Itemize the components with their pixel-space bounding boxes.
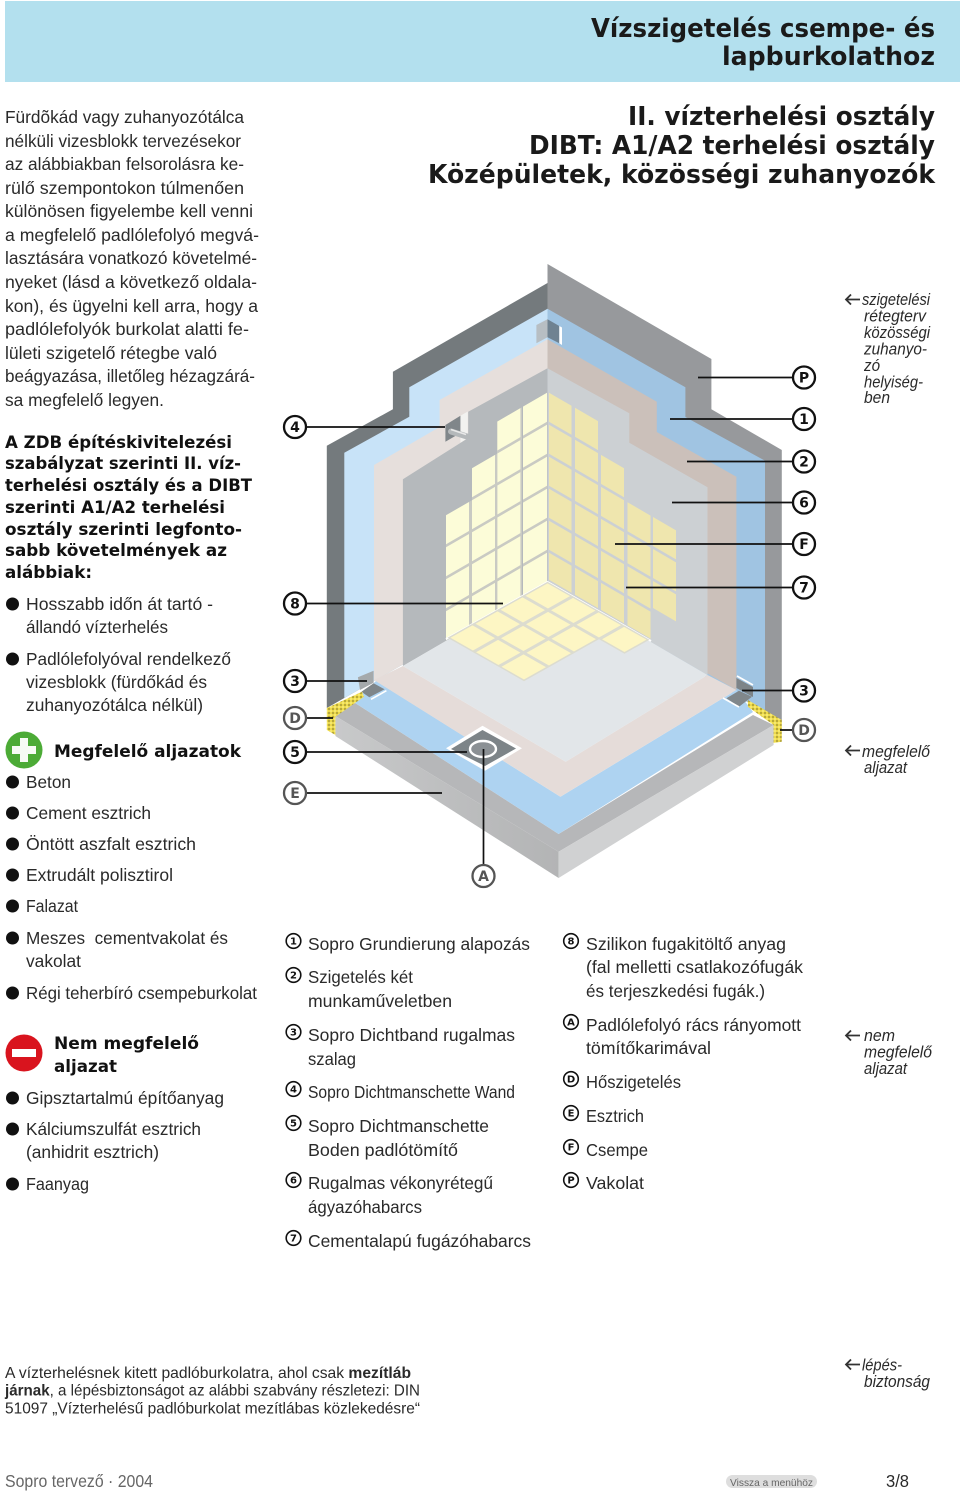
requirements list: Hosszabb időn át tartó - xyxy=(26,594,213,614)
intro text block: beágyazása, illetőleg hézagzárá- xyxy=(5,366,255,386)
barefoot note xyxy=(4,1365,420,1418)
left wall tiles xyxy=(446,393,547,640)
intro text block: padlólefolyók burkolat alatti fe- xyxy=(5,319,249,339)
title: Vízszigetelés csempe- és xyxy=(591,14,935,44)
barefoot note: járnak, a lépésbiztonságot az alábbi szabvány részletezi: DIN xyxy=(4,1382,420,1400)
requirements list: vizesblokk (fürdőkád és xyxy=(26,672,207,692)
list: unsuitable substrates: Faanyag xyxy=(26,1174,89,1194)
legend item 7: Cementalapú fugázóhabarcs xyxy=(308,1231,531,1251)
callout D left xyxy=(284,707,306,729)
legend item E: Esztrich xyxy=(586,1106,644,1126)
list: suitable substrates: vakolat xyxy=(26,951,81,971)
intro text block: sa megfelelő legyen. xyxy=(5,390,164,410)
footer: publisher: Sopro tervező · 2004 xyxy=(5,1471,153,1491)
list: suitable substrates xyxy=(6,772,257,1003)
legend item 8: és terjeszkedési fugák.) xyxy=(586,981,765,1001)
requirements list: állandó vízterhelés xyxy=(26,617,168,637)
legend item 4: Sopro Dichtmanschette Wand xyxy=(308,1082,515,1102)
list: unsuitable substrates: Kálciumszulfát esztrich xyxy=(26,1119,201,1139)
thermal insulation right xyxy=(748,700,782,743)
legend item 6 xyxy=(286,1173,493,1217)
legend item 2: 2 xyxy=(290,970,297,982)
legend column 1 xyxy=(286,934,531,1251)
bold requirements heading: alábbiak: xyxy=(5,563,92,583)
legend item E: E xyxy=(568,1108,575,1120)
barefoot note: 51097 „Vízterhelésű padlóburkolat mezítlábas közlekedésre“ xyxy=(5,1400,420,1418)
legend item 5 xyxy=(286,1116,489,1160)
right wall tiles xyxy=(549,393,676,653)
side note: unsuitable substrate: megfelelő xyxy=(864,1044,933,1062)
intro text block: nyeket (lásd a következő oldala- xyxy=(5,272,257,292)
intro text block: kon), és ügyelni kell arra, hogy a xyxy=(5,296,258,316)
side note: layer plan: zuhanyo- xyxy=(863,340,927,358)
legend item 6: ágyazóhabarcs xyxy=(308,1197,422,1217)
intro text block: a megfelelő padlólefolyó megvá- xyxy=(5,225,259,245)
legend item 1: Sopro Grundierung alapozás xyxy=(308,934,530,954)
bold requirements heading: A ZDB építéskivitelezési xyxy=(5,433,232,453)
list: suitable substrates: Meszes cementvakolat és xyxy=(26,928,228,948)
callout E xyxy=(284,782,306,804)
callout 1: 1 xyxy=(799,412,809,428)
legend item D: D xyxy=(567,1074,575,1086)
side note: layer plan: zó xyxy=(863,357,880,375)
side note: layer plan: helyiség- xyxy=(864,374,923,392)
left sealing tape corner xyxy=(358,671,386,699)
callout P: P xyxy=(799,370,809,386)
wall layers xyxy=(327,264,782,723)
bold requirements heading: sabb követelmények az xyxy=(5,541,227,561)
legend item 1: 1 xyxy=(290,936,297,948)
bold requirements heading xyxy=(5,433,252,583)
header band xyxy=(5,1,960,82)
bold requirements heading: osztály szerinti legfonto- xyxy=(5,520,242,540)
thermal insulation left xyxy=(327,692,364,735)
callout 3 left: 3 xyxy=(290,674,300,690)
bold requirements heading: terhelési osztály és a DIBT xyxy=(5,476,252,496)
legend item A: Padlólefolyó rács rányomott xyxy=(586,1015,801,1035)
bold requirements heading: szerinti A1/A2 terhelési xyxy=(5,498,225,518)
callout F: F xyxy=(799,537,809,553)
wall pipe sleeve xyxy=(445,412,468,443)
requirements list: Padlólefolyóval rendelkező xyxy=(26,649,231,669)
legend item 6: 6 xyxy=(290,1176,297,1186)
legend item 2 xyxy=(286,967,452,1011)
callout 7 xyxy=(793,576,815,598)
legend item F: F xyxy=(568,1142,574,1154)
requirements list: zuhanyozótálca nélkül) xyxy=(26,695,203,715)
callout E: E xyxy=(290,786,300,802)
list: suitable substrates: Beton xyxy=(26,772,71,792)
upper wall patch xyxy=(536,319,562,345)
legend item 3: szalag xyxy=(308,1049,356,1069)
legend item 2: munkaműveletben xyxy=(308,991,452,1011)
intro text block: nélküli vizesblokk tervezésekor xyxy=(5,131,241,151)
unsuitable substrates xyxy=(6,1034,224,1194)
list: suitable substrates: Régi teherbíró csempeburkolat xyxy=(26,983,257,1003)
callout F xyxy=(793,533,815,555)
list: suitable substrates: Falazat xyxy=(26,896,78,916)
legend item 4: 4 xyxy=(290,1084,297,1096)
intro text block: különösen figyelembe kell venni xyxy=(5,201,253,221)
legend item 8 xyxy=(564,934,803,1001)
callout D right xyxy=(793,719,815,741)
side note: layer plan xyxy=(846,291,931,407)
callout 3 left xyxy=(284,670,306,692)
legend item D: Hőszigetelés xyxy=(586,1072,681,1092)
callout P xyxy=(793,366,815,388)
floor drain xyxy=(446,726,522,771)
legend item F xyxy=(564,1140,648,1160)
legend item P: Vakolat xyxy=(586,1173,644,1193)
legend item E xyxy=(564,1106,644,1126)
callout 3 right xyxy=(793,680,815,702)
subtitle: load class: DIBT: A1/A2 terhelési osztály xyxy=(529,131,935,161)
callout D right: D xyxy=(798,723,810,739)
floor tiles xyxy=(446,582,651,696)
side note: slip resistance xyxy=(846,1356,931,1391)
side note: suitable substrate xyxy=(846,743,931,777)
intro text block: lületi szigetelő rétegbe való xyxy=(5,343,217,363)
callout A xyxy=(472,865,494,887)
right sealing tape corner xyxy=(723,676,753,707)
list: suitable substrates: Öntött aszfalt esztrich xyxy=(26,834,196,854)
legend item A xyxy=(564,1015,801,1058)
legend item 3: Sopro Dichtband rugalmas xyxy=(308,1025,515,1045)
title: lapburkolathoz xyxy=(722,42,935,72)
heading: suitable substrates: Megfelelő aljazatok xyxy=(54,742,242,762)
callout 6 xyxy=(793,492,815,514)
callout 5 xyxy=(284,741,306,763)
subtitle: load class: Középületek, közösségi zuhanyozók xyxy=(428,160,936,190)
callout 3 right: 3 xyxy=(799,684,809,700)
legend item 6: Rugalmas vékonyrétegű xyxy=(308,1173,493,1193)
floor: screed slab xyxy=(335,702,774,878)
barefoot note: A vízterhelésnek kitett padlóburkolatra, ahol csak mezítláb xyxy=(5,1365,411,1382)
title xyxy=(591,14,935,72)
subtitle: load class xyxy=(428,102,936,190)
legend item 5: 5 xyxy=(290,1118,297,1130)
legend item A: A xyxy=(567,1018,575,1028)
button: back to menu: Vissza a menühöz xyxy=(730,1477,813,1489)
callout 2: 2 xyxy=(799,454,809,470)
callout 1 xyxy=(793,408,815,430)
icon: green plus xyxy=(6,732,42,768)
callout 4: 4 xyxy=(290,420,300,436)
callout 6: 6 xyxy=(799,496,809,512)
list: suitable substrates: Cement esztrich xyxy=(26,803,151,823)
side note: unsuitable substrate: nem xyxy=(864,1027,895,1045)
list: unsuitable substrates: Gipsztartalmú építőanyag xyxy=(26,1088,224,1108)
legend item 2: Szigetelés két xyxy=(308,967,413,987)
leader lines xyxy=(307,378,792,864)
callout 4 xyxy=(284,416,306,438)
legend item 5: Sopro Dichtmanschette xyxy=(308,1116,489,1136)
side note: unsuitable substrate xyxy=(846,1027,933,1078)
subtitle: load class: II. vízterhelési osztály xyxy=(628,102,935,132)
legend item P xyxy=(564,1173,644,1193)
list: suitable substrates: Extrudált polisztirol xyxy=(26,865,173,885)
intro text block: lasztására vonatkozó követelmé- xyxy=(5,248,257,268)
legend item 8: (fal melletti csatlakozófugák xyxy=(586,957,803,977)
callout 8: 8 xyxy=(290,596,300,612)
list: unsuitable substrates: (anhidrit esztrich) xyxy=(26,1142,159,1162)
legend item 3 xyxy=(286,1025,515,1069)
legend item P: P xyxy=(567,1176,575,1186)
callout D left: D xyxy=(289,711,301,727)
side note: layer plan: ben xyxy=(864,389,890,407)
side note: slip resistance: biztonság xyxy=(864,1373,931,1391)
callout A: A xyxy=(478,869,489,885)
legend column 2 xyxy=(564,934,803,1193)
side note: slip resistance: lépés- xyxy=(862,1356,902,1374)
intro text block: az alábbiakban felsorolásra ke- xyxy=(5,154,244,174)
side note: suitable substrate: aljazat xyxy=(864,759,908,777)
page number: 3/8 xyxy=(886,1471,909,1491)
side note: suitable substrate: megfelelő xyxy=(862,743,931,761)
callout 8 xyxy=(284,592,306,614)
side note: layer plan: közösségi xyxy=(864,324,931,342)
isometric layer diagram xyxy=(284,264,815,887)
bold requirements heading: szabályzat szerinti II. víz- xyxy=(5,454,241,474)
intro text block xyxy=(5,107,259,410)
legend item 8: 8 xyxy=(568,936,575,948)
heading: unsuitable substrates: Nem megfelelő xyxy=(54,1034,199,1054)
callout 5: 5 xyxy=(290,745,300,761)
legend item 3: 3 xyxy=(290,1028,297,1038)
side note: unsuitable substrate: aljazat xyxy=(864,1060,908,1078)
intro text block: Fürdõkád vagy zuhanyozótálca xyxy=(5,107,244,127)
icon: red minus xyxy=(6,1034,42,1072)
side note: layer plan: rétegterv xyxy=(864,308,928,326)
suitable substrates xyxy=(6,732,257,1003)
legend item F: Csempe xyxy=(586,1140,648,1160)
list: unsuitable substrates xyxy=(6,1088,224,1194)
callout 2 xyxy=(793,450,815,472)
requirements list xyxy=(6,594,231,715)
side note: layer plan: szigetelési xyxy=(862,291,931,309)
legend item 8: Szilikon fugakitöltő anyag xyxy=(586,934,786,954)
floor: sealing and primer layers xyxy=(353,582,753,834)
callout 7: 7 xyxy=(799,580,809,596)
heading: unsuitable substrates: aljazat xyxy=(54,1057,117,1077)
legend item A: tömítőkarimával xyxy=(586,1038,711,1058)
heading: unsuitable substrates xyxy=(54,1034,199,1077)
intro text block: rülő szempontokon túlmenően xyxy=(5,178,244,198)
legend item 5: Boden padlótömítő xyxy=(308,1140,458,1160)
legend item 7: 7 xyxy=(290,1234,297,1244)
